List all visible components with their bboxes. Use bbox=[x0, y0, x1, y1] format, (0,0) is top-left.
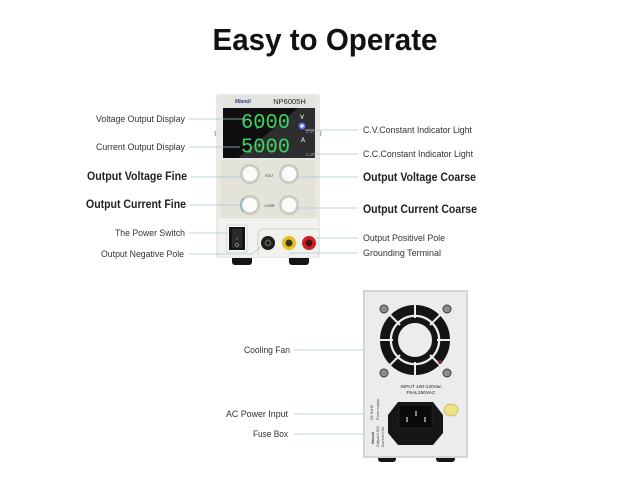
display: 5000 bbox=[241, 136, 290, 160]
panel: back of power supply bbox=[363, 290, 468, 462]
rating text strip: CE RoHS bbox=[370, 404, 374, 420]
label: ac power input: AC Power Input bbox=[226, 409, 288, 419]
power switch bbox=[227, 225, 247, 252]
label: cooling fan: Cooling Fan bbox=[244, 345, 290, 355]
label: output negative pole: Output Negative Pole bbox=[101, 249, 184, 259]
icon: cooling fan grille bbox=[378, 303, 452, 377]
icon: screws bbox=[380, 305, 451, 377]
label: cv indicator: C.V.Constant Indicator Light bbox=[363, 125, 472, 135]
display: V bbox=[300, 115, 304, 121]
right bold labels bbox=[363, 172, 477, 216]
display: C.C. bbox=[306, 152, 314, 157]
left callout labels, front bbox=[96, 114, 185, 259]
display bbox=[223, 108, 315, 160]
rating text strip: Current 0-5A bbox=[381, 426, 385, 447]
label: output voltage coarse: Output Voltage Coarse bbox=[363, 172, 476, 184]
front case body bbox=[216, 94, 320, 258]
power switch: I bbox=[236, 236, 238, 241]
left bold labels bbox=[86, 171, 187, 211]
label: current output display: Current Output Display bbox=[96, 142, 185, 152]
label: output current coarse: Output Current Coarse bbox=[363, 204, 477, 216]
output terminals bbox=[258, 229, 318, 255]
model header: Mlandi bbox=[235, 99, 251, 105]
input rating label: F6AL250VAC bbox=[407, 390, 436, 396]
rating text strip: Manual bbox=[371, 432, 375, 444]
model header: NP6005H bbox=[273, 97, 306, 106]
label: output current fine: Output Current Fine bbox=[86, 199, 186, 211]
icon: front feet bbox=[232, 255, 309, 265]
input rating label bbox=[400, 384, 442, 396]
display: C.V. bbox=[306, 129, 314, 134]
label: cc indicator: C.C.Constant Indicator Light bbox=[363, 149, 473, 159]
rating text strip bbox=[370, 399, 385, 447]
knobs bbox=[240, 164, 299, 215]
input rating label: INPUT 100-120Vac bbox=[400, 384, 442, 390]
icon: AC inlet bbox=[388, 402, 443, 445]
icon: back feet bbox=[378, 454, 455, 462]
label: voltage output display: Voltage Output Display bbox=[96, 114, 185, 124]
back case bbox=[363, 290, 468, 458]
rating text strip: Output 0-60V bbox=[376, 426, 380, 447]
label: grounding terminal: Grounding Terminal bbox=[363, 248, 441, 258]
rating text strip: Power supply bbox=[376, 399, 380, 420]
label: output positive pole: Output Positivel Pole bbox=[363, 233, 445, 243]
back callout labels bbox=[226, 345, 290, 439]
display: 6000 bbox=[241, 112, 290, 135]
knobs: VOLT bbox=[265, 174, 275, 178]
display: A bbox=[301, 138, 306, 144]
knobs: CURR bbox=[264, 204, 275, 208]
callout leader lines bbox=[189, 119, 398, 434]
label: fuse box: Fuse Box bbox=[253, 429, 288, 439]
label: the power switch: The Power Switch bbox=[115, 228, 185, 238]
side handles bbox=[215, 131, 321, 136]
title: Easy to Operate bbox=[212, 22, 438, 57]
right callout labels, front bbox=[363, 125, 473, 258]
model header bbox=[223, 96, 315, 108]
icon: round sticker bbox=[444, 404, 458, 416]
label: output voltage fine: Output Voltage Fine bbox=[87, 171, 187, 183]
panel: front of power supply bbox=[215, 94, 321, 265]
